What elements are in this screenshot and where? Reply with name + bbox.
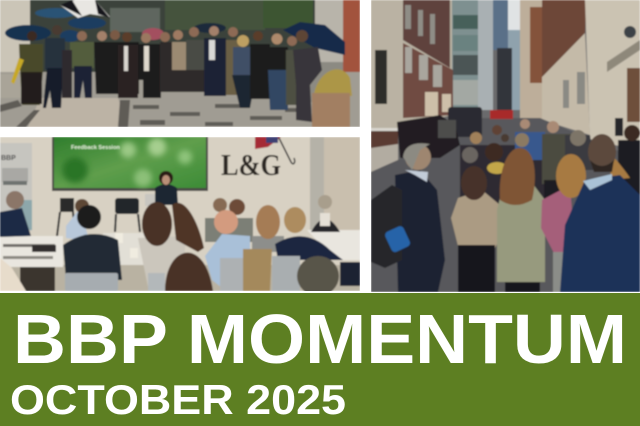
woman with pink scarf (541, 154, 630, 292)
woman in green coat (497, 148, 545, 292)
parked vans and bus (397, 107, 513, 158)
roller banner: BBP (1, 155, 16, 162)
subheading: OCTOBER 2025: OCTOBER 2025 (10, 376, 346, 423)
attendees (0, 191, 360, 296)
presentation screen: Feedback Session (71, 145, 120, 151)
left building (371, 0, 453, 172)
street (371, 118, 640, 292)
paving pattern (0, 100, 305, 127)
L&G logo: L&G (221, 147, 281, 182)
people row (11, 25, 322, 122)
planter with grasses (312, 69, 352, 127)
tour group background (460, 118, 640, 204)
right buildings (520, 0, 640, 150)
presentation screen (52, 137, 208, 191)
man in navy blazer (560, 134, 640, 292)
man with backpack (371, 143, 445, 292)
title banner (0, 293, 640, 426)
roller banner (0, 143, 32, 231)
chairs and speaker (57, 171, 178, 236)
photo: meeting room with speaker (0, 137, 360, 296)
umbrellas group (5, 0, 345, 55)
background towers and sky (450, 0, 523, 115)
photo: group outside building with umbrellas (0, 0, 360, 127)
heading: BBP MOMENTUM: BBP MOMENTUM (13, 300, 627, 378)
woman in beige jacket (451, 166, 502, 292)
conference tables (0, 230, 360, 291)
photo: walking tour group on a city street (371, 0, 640, 292)
